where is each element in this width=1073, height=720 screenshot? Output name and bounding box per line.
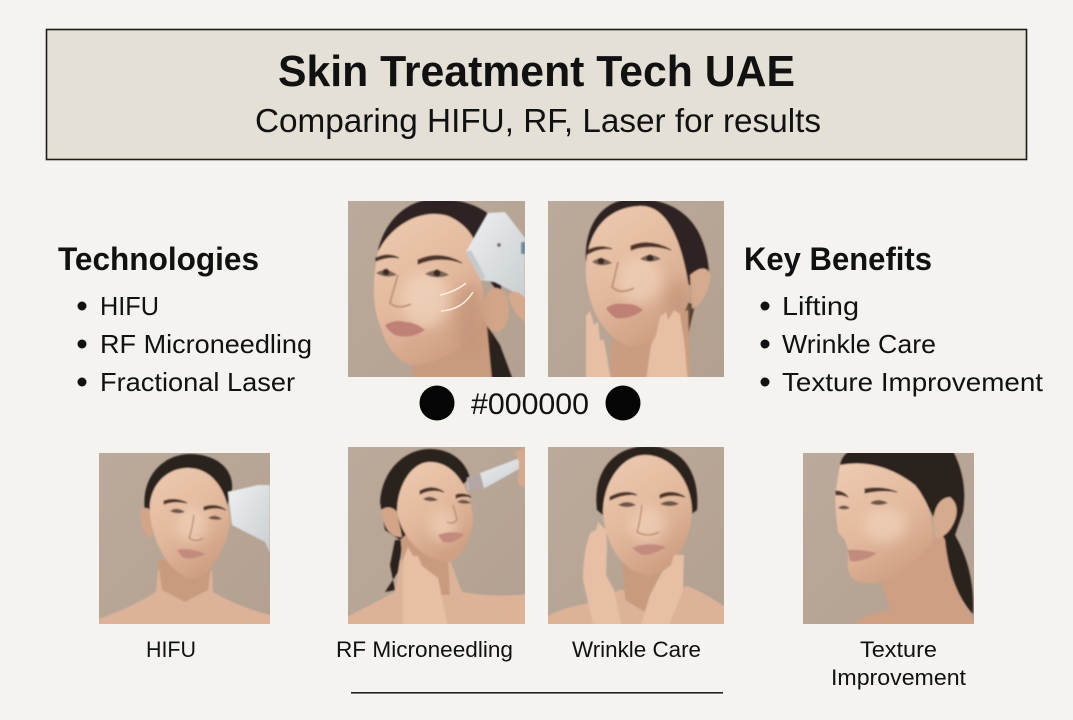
colour code label: #000000 [471,388,589,421]
heading: key benefits: Key Benefits [744,241,932,277]
card: Texture Improvement [803,451,978,690]
icon: right black dot [606,386,640,420]
title: Skin Treatment Tech UAE [278,47,795,96]
icon: left black dot [420,386,454,420]
photo: RF microneedling treatment [345,447,528,628]
caption: Wrinkle Care: Wrinkle Care [572,637,701,662]
photo: wrinkle care [545,446,727,628]
caption: Texture Improvement [831,637,966,690]
treatment guide lines [440,283,473,311]
list: technologies items: HIFU [100,291,159,321]
caption: Texture Improvement: Improvement [831,665,966,690]
list: technologies items: Fractional Laser [100,367,295,397]
caption: Texture Improvement: Texture [860,637,937,662]
card: HIFU [96,453,274,662]
caption: HIFU: HIFU [146,637,196,662]
photo: HIFU treatment [96,453,274,628]
photo: woman touching jaw with both hands [548,199,724,382]
list: benefits items [760,291,1044,397]
card: RF Microneedling [336,447,528,662]
list: benefits items: Texture Improvement [782,367,1044,397]
caption: RF Microneedling: RF Microneedling [336,637,513,662]
panel: key benefits list [744,241,1044,397]
title banner [46,30,1026,160]
photo: texture improvement profile [803,451,978,628]
list: benefits items: Lifting [782,291,859,321]
list: technologies items [78,291,312,397]
card: Wrinkle Care [545,446,727,662]
list: benefits items: Wrinkle Care [782,329,936,359]
panel: technologies list [58,241,312,397]
list: technologies items: RF Microneedling [100,329,312,359]
photo: woman with HIFU device at temple [348,199,525,380]
subtitle: Comparing HIFU, RF, Laser for results [255,102,821,139]
heading: technologies: Technologies [58,241,259,277]
